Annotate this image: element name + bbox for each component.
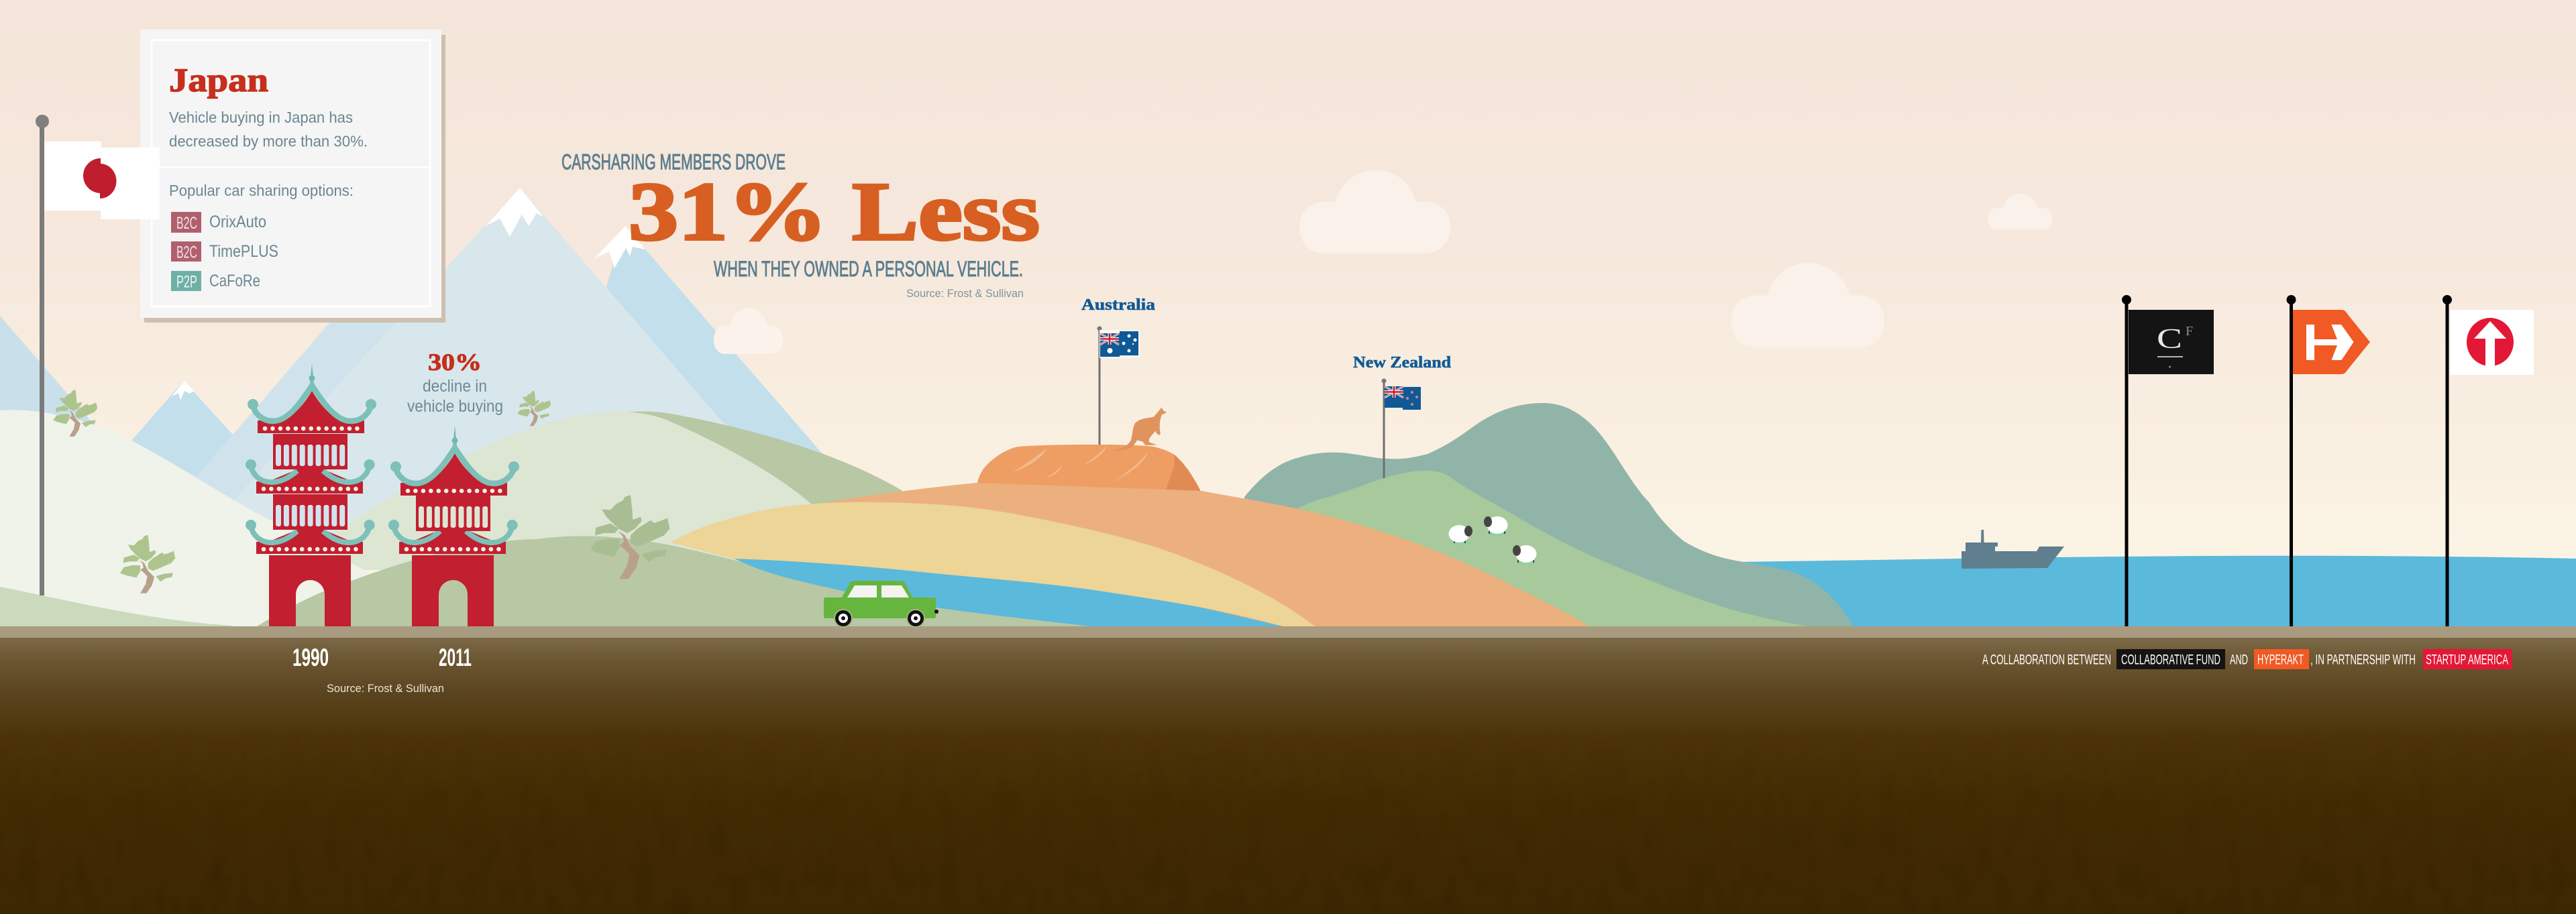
mountains (0, 188, 872, 536)
stat: 30% decline (407, 349, 503, 416)
credit: collaborative fund: COLLABORATIVE FUND (2121, 652, 2220, 668)
option: CaFoRe: CaFoRe (209, 272, 260, 290)
headline: WHEN THEY OWNED A PERSONAL VEHICLE. (714, 257, 1023, 281)
option: OrixAuto (171, 212, 266, 233)
pagoda 2011 (388, 426, 519, 626)
sponsor flag: collaborative fund (2122, 295, 2214, 626)
stat: 30% decline: 30% (428, 349, 482, 376)
japan hills (0, 410, 939, 626)
sheep 3 (1513, 545, 1536, 565)
stat: 30% decline: decline in (423, 377, 487, 396)
footer credits: A COLLABORATION BETWEEN (1982, 652, 2111, 668)
ship (1962, 530, 2064, 569)
year labels (292, 644, 472, 671)
trees (53, 390, 669, 593)
credit: startup america (2423, 649, 2512, 669)
sponsor flag: hyperakt (2286, 295, 2370, 626)
soil (0, 638, 2576, 914)
headline: Source: Frost & Sullivan (906, 287, 1024, 300)
flag: new zealand (1382, 378, 1421, 478)
clouds (1299, 170, 2052, 347)
text: vehicle buying: decreased by more than 30%. (169, 133, 368, 150)
option: CaFoRe (171, 271, 260, 291)
sea (1737, 556, 2576, 626)
pagoda 1990 (246, 363, 376, 626)
option: TimePLUS: TimePLUS (209, 242, 278, 261)
sponsor flag: collaborative fund: C (2157, 324, 2182, 355)
sponsor flag: startup america (2443, 295, 2534, 626)
credit: startup america: STARTUP AMERICA (2426, 652, 2508, 668)
cloud behind hills (714, 308, 783, 354)
option: TimePLUS: B2C (176, 243, 197, 262)
label: australia: Australia (1081, 296, 1155, 314)
flag: australia (1097, 326, 1140, 445)
text: vehicle buying: Vehicle buying in Japan has (169, 109, 353, 126)
text: vehicle buying (169, 109, 368, 150)
car (824, 581, 938, 628)
sponsor flag: collaborative fund: F (2186, 324, 2193, 339)
footer credits: , IN PARTNERSHIP WITH (2310, 652, 2416, 668)
headline (561, 150, 1040, 300)
flag: japan (36, 115, 160, 595)
text: popular options: Popular car sharing options: (169, 182, 354, 199)
stat: 30% decline: vehicle buying (407, 397, 503, 416)
sheep (1449, 516, 1536, 565)
new zealand hills (1140, 403, 1853, 626)
sheep 2 (1484, 516, 1508, 536)
uluru rock (977, 445, 1201, 496)
source: japan: Source: Frost & Sullivan (327, 682, 444, 695)
headline: CARSHARING MEMBERS DROVE (561, 150, 786, 174)
road (0, 626, 2576, 638)
footer credits: AND (2230, 652, 2248, 668)
credit: hyperakt: HYPERAKT (2257, 652, 2304, 668)
heading: japan: Japan (169, 61, 268, 99)
option: OrixAuto: OrixAuto (209, 213, 266, 231)
credit: collaborative fund (2116, 649, 2225, 669)
kangaroo (1111, 407, 1167, 451)
option: OrixAuto: B2C (176, 214, 197, 233)
option: TimePLUS (171, 241, 278, 262)
snow caps (172, 188, 645, 400)
year labels: 1990 (292, 644, 329, 671)
headline: 31% Less (629, 166, 1040, 258)
panel: japan card (140, 30, 445, 323)
credit: hyperakt (2254, 649, 2309, 669)
sheep 1 (1449, 525, 1472, 545)
option: CaFoRe: P2P (176, 272, 197, 291)
footer credits (1982, 649, 2512, 669)
sky background (0, 0, 2576, 626)
year labels: 2011 (439, 644, 472, 671)
australia hills and lake (257, 483, 1590, 626)
label: new zealand: New Zealand (1353, 354, 1452, 372)
